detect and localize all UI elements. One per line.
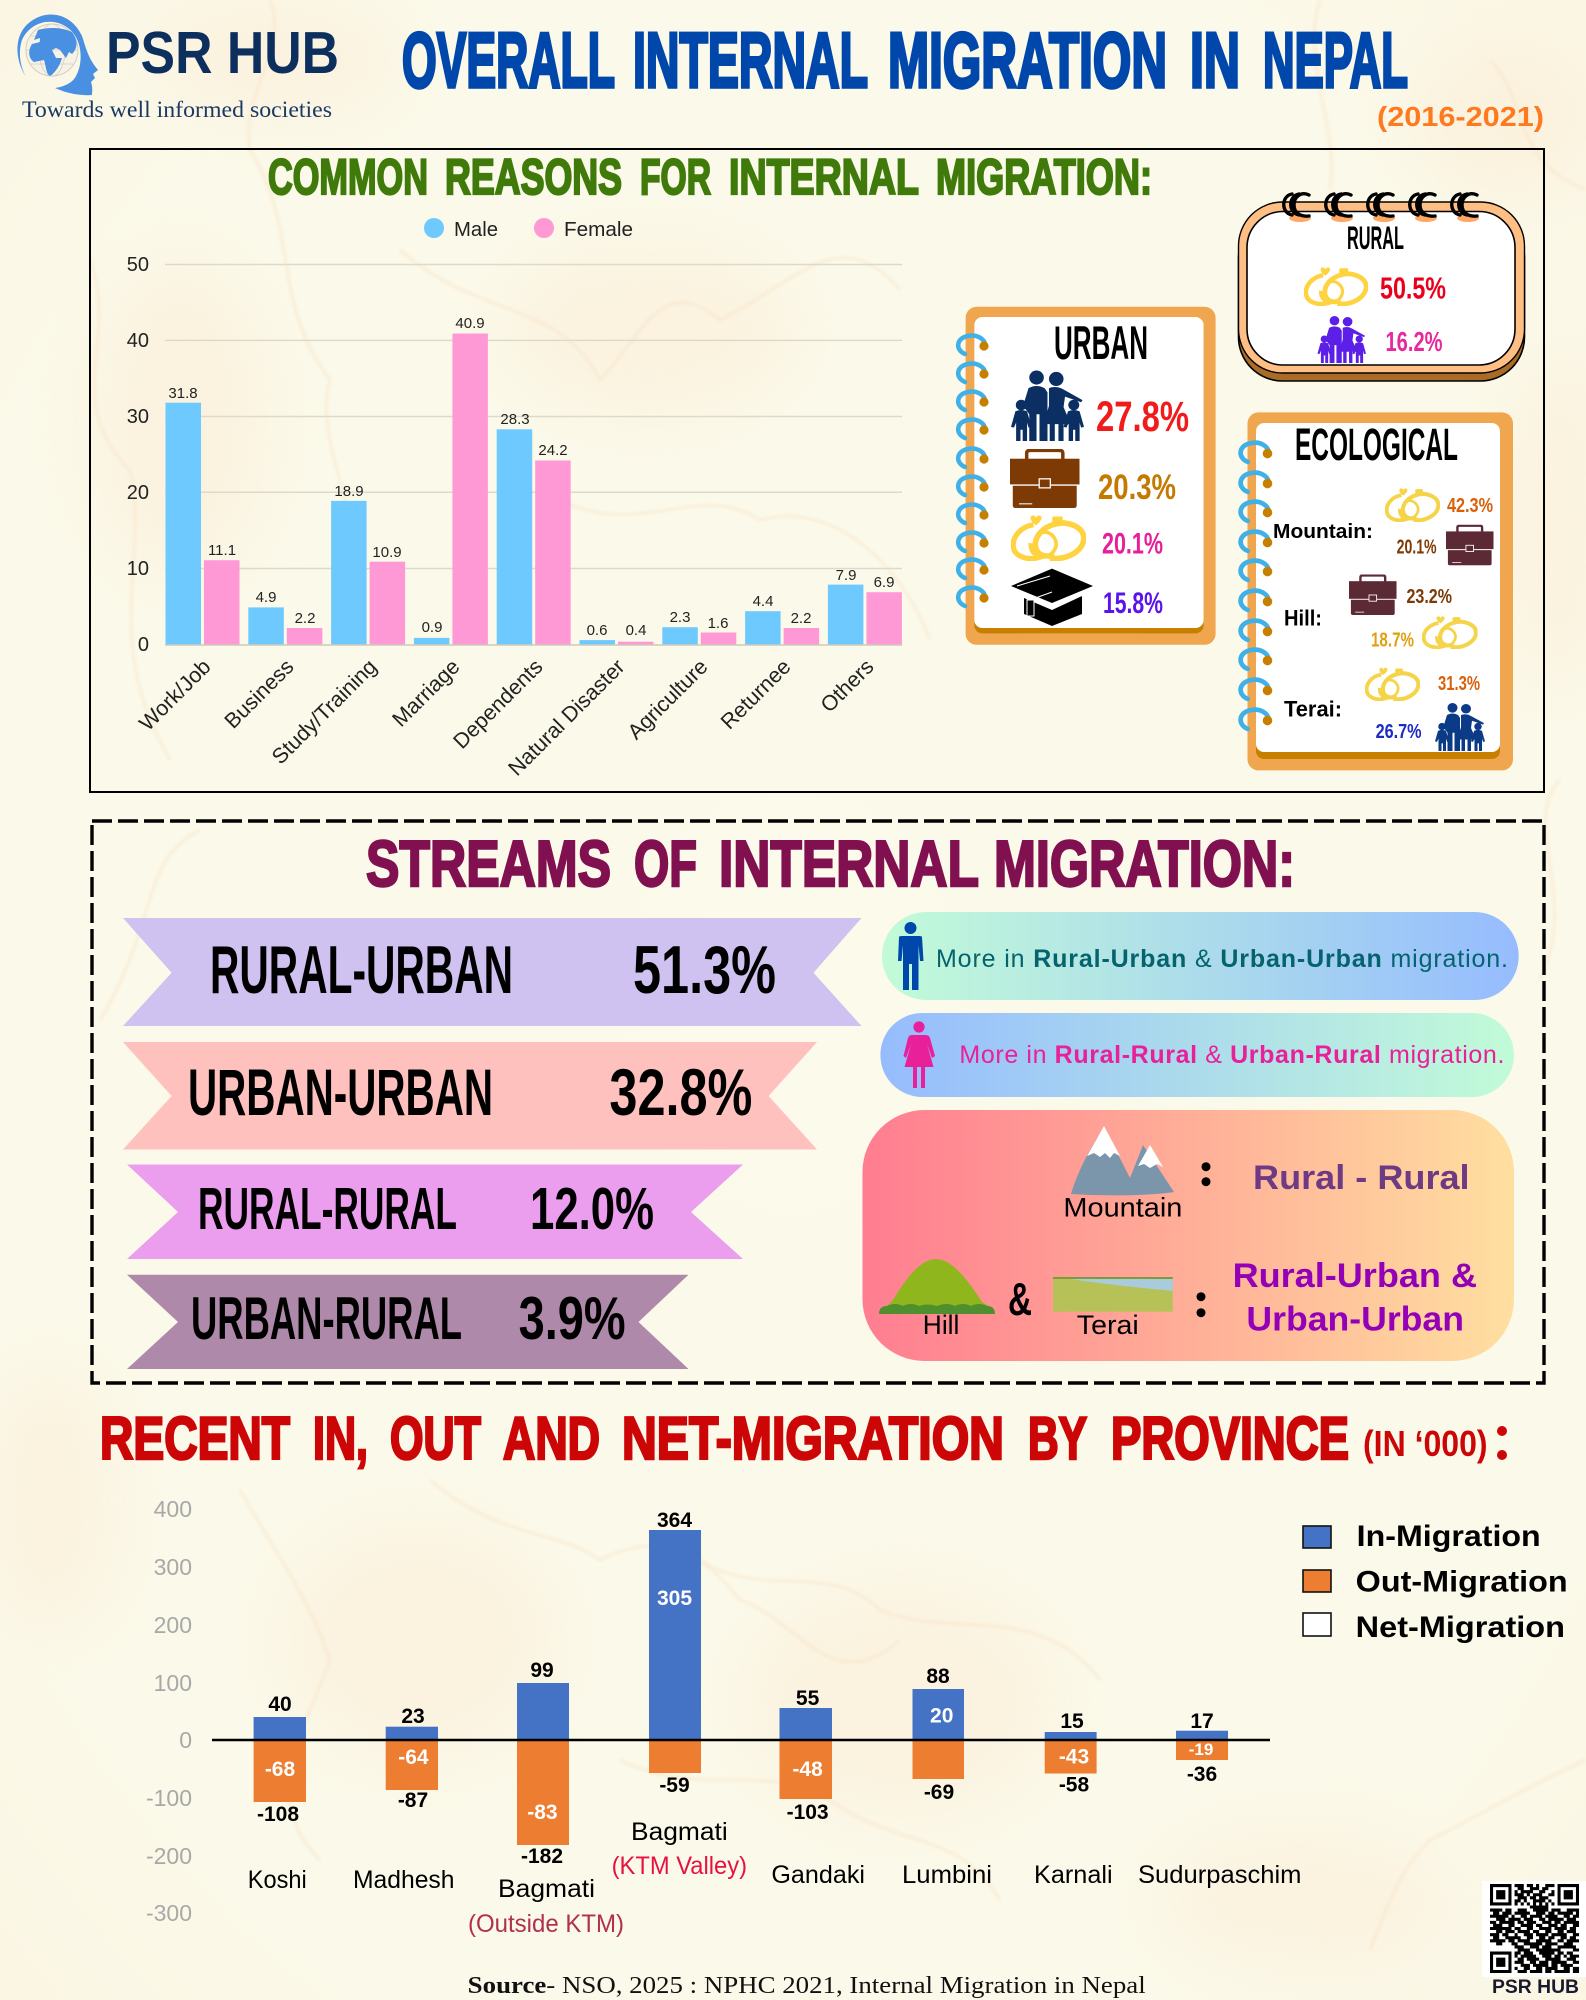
heading: province migration: AND (503, 1405, 600, 1472)
spiral binding (958, 336, 989, 606)
net-migration labels: -48 (792, 1758, 823, 1781)
hill label: Hill (923, 1310, 959, 1340)
terai row: Terai: (1284, 696, 1342, 721)
ampersand: & (1008, 1273, 1032, 1325)
mountain label: Mountain (1063, 1193, 1182, 1223)
mountain stream: Rural - Rural (1253, 1159, 1470, 1197)
urban work value: 20.3% (1098, 468, 1176, 507)
heading: common reasons: INTERNAL (729, 149, 919, 205)
out-migration labels: -108 (257, 1803, 299, 1826)
hill and terai streams (1233, 1257, 1477, 1339)
province labels: Lumbini (902, 1861, 992, 1889)
y axis labels: 50 (127, 254, 149, 276)
heading: streams: INTERNAL (719, 827, 979, 900)
ribbon: rural-urban: 51.3% (633, 932, 776, 1008)
category labels (135, 655, 879, 781)
icon: family (1318, 316, 1366, 363)
spiral binding (1241, 443, 1272, 729)
net-migration labels: -19 (1189, 1740, 1213, 1759)
value labels: 6.9 (874, 574, 894, 591)
male text: More in Rural-Urban & Urban-Urban migration. (936, 945, 1508, 973)
in-migration labels: 364 (657, 1509, 692, 1532)
value labels: 0.6 (587, 622, 607, 639)
province labels: Gandaki (771, 1861, 865, 1889)
province labels: Koshi (248, 1866, 307, 1894)
callout: female pattern (880, 1013, 1514, 1097)
chart: province migration (146, 1496, 1302, 1938)
province labels (248, 1818, 1301, 1938)
net-migration labels: -43 (1059, 1746, 1089, 1769)
heading: streams: OF (634, 827, 697, 900)
icon: graduation cap (1011, 569, 1093, 626)
colon (1196, 1292, 1206, 1317)
female bars (204, 334, 902, 645)
category labels: Marriage (388, 655, 465, 732)
hill and terai streams: Urban-Urban (1246, 1301, 1464, 1339)
value labels: 7.9 (836, 567, 856, 584)
value labels: 40.9 (455, 315, 485, 332)
heading: common reasons: REASONS (445, 149, 622, 205)
hill row: 23.2% (1406, 586, 1452, 608)
heading: common reasons (268, 149, 1152, 205)
out-migration labels (257, 1763, 1217, 1868)
ribbon: urban-urban: URBAN-URBAN (188, 1055, 493, 1129)
y axis labels (146, 1496, 192, 1926)
province labels: Bagmati (498, 1875, 595, 1903)
mountain row: 42.3% (1447, 495, 1493, 517)
y axis labels: 20 (127, 482, 149, 504)
ribbon: rural-rural: 12.0% (530, 1176, 654, 1242)
category labels: Work/Job (135, 655, 216, 735)
category labels: Returnee (716, 655, 796, 734)
logo tagline: Towards well informed societies (22, 97, 332, 122)
title: NEPAL (1263, 16, 1408, 104)
QR code (1482, 1881, 1586, 1998)
heading: province migration: OUT (390, 1405, 481, 1472)
net-migration labels (265, 1587, 1213, 1824)
in-migration labels: 15 (1060, 1710, 1084, 1733)
QR caption: PSR HUB (1492, 1977, 1579, 1998)
in-migration bars (254, 1530, 1228, 1740)
heading: province migration: NET-MIGRATION (622, 1405, 1004, 1472)
terai label: Terai (1077, 1310, 1139, 1340)
legend: migration types (1303, 1520, 1568, 1644)
ribbon: urban-rural (127, 1275, 688, 1369)
value labels: 28.3 (500, 411, 530, 428)
legend: sex: Female (564, 219, 633, 241)
icon: rings (1013, 516, 1084, 559)
ribbon: rural-urban: RURAL-URBAN (210, 932, 513, 1008)
terai row: 31.3% (1438, 673, 1480, 695)
out-migration labels: -103 (787, 1801, 829, 1824)
urban heading: URBAN (1054, 316, 1148, 369)
mountain row (1273, 488, 1494, 565)
ribbon: rural-urban (123, 918, 862, 1026)
heading: province migration: PROVINCE (1111, 1405, 1349, 1472)
bar chart: reasons by sex (127, 218, 902, 781)
province labels: Karnali (1034, 1861, 1113, 1889)
male bars (166, 403, 863, 645)
rural dependents value: 16.2% (1386, 326, 1443, 357)
title: INTERNAL (633, 16, 868, 104)
urban study value: 15.8% (1103, 587, 1163, 620)
title: OVERALL (402, 16, 615, 104)
icon: briefcase (1010, 450, 1080, 508)
value labels: 0.4 (626, 622, 646, 639)
y axis labels: 200 (154, 1612, 192, 1638)
y axis labels: 300 (154, 1554, 192, 1580)
value labels: 2.2 (791, 610, 811, 627)
legend: migration types: Net-Migration (1356, 1611, 1565, 1644)
value labels: 18.9 (334, 483, 364, 500)
value labels: 2.3 (670, 609, 690, 626)
heading: province migration: BY (1028, 1405, 1087, 1472)
value labels: 4.4 (753, 593, 773, 610)
net-migration labels: 20 (930, 1705, 953, 1728)
y axis labels: 0 (179, 1727, 192, 1753)
net-migration labels: -64 (398, 1746, 429, 1769)
province labels: (Outside KTM) (468, 1910, 624, 1938)
icon: woman (904, 1021, 935, 1088)
net-migration labels: -68 (265, 1758, 295, 1781)
in-migration labels: 99 (530, 1659, 554, 1682)
y axis labels: -200 (146, 1843, 192, 1869)
title (402, 16, 1408, 104)
heading: common reasons: FOR (640, 149, 711, 205)
notebook: urban (958, 307, 1216, 645)
category labels: Study/Training (267, 655, 382, 769)
value labels: 0.9 (422, 619, 442, 636)
net-migration labels: -83 (527, 1801, 558, 1824)
coil binding (1284, 194, 1479, 222)
hill row (1284, 575, 1476, 652)
hill row: Hill: (1284, 606, 1322, 630)
heading: province migration: (IN ‘000) (1363, 1423, 1488, 1464)
out-migration labels: -182 (521, 1845, 563, 1868)
out-migration labels: -59 (659, 1774, 690, 1797)
in-migration labels: 17 (1190, 1710, 1214, 1733)
category labels: Natural Disaster (504, 655, 630, 781)
ribbon: rural-rural (127, 1164, 743, 1259)
value labels (168, 315, 894, 639)
ribbon: urban-urban (123, 1042, 817, 1150)
heading: province migration: RECENT (100, 1405, 290, 1472)
notebook: rural (1238, 194, 1524, 381)
heading: streams: MIGRATION: (994, 827, 1295, 900)
icon: family (1011, 370, 1084, 441)
logo wordmark: PSR HUB (106, 20, 339, 86)
y axis labels: 400 (154, 1496, 192, 1522)
out-migration bars (254, 1741, 1228, 1845)
in-migration labels: 40 (268, 1693, 292, 1716)
callout: ecological belts (862, 1110, 1514, 1361)
category labels: Business (220, 655, 299, 733)
logo: PSR HUB (17, 14, 339, 122)
value labels: 24.2 (538, 442, 568, 459)
y axis labels (127, 254, 149, 656)
subtitle: years: (2016-2021) (1377, 101, 1544, 132)
urban marriage value: 20.1% (1102, 528, 1163, 560)
ribbon: rural-rural: RURAL-RURAL (198, 1176, 457, 1242)
province labels: (KTM Valley) (612, 1852, 747, 1880)
in-migration labels (268, 1509, 1214, 1733)
icon: man (898, 922, 924, 990)
source: Source - NSO, 2025 : NPHC 2021, Internal Migration in Nepal (468, 1973, 1146, 1999)
category labels: Agriculture (623, 655, 713, 744)
female text: More in Rural-Rural & Urban-Rural migration. (959, 1041, 1504, 1069)
value labels: 10.9 (372, 544, 402, 561)
value labels: 1.6 (708, 615, 728, 632)
heading: common reasons: MIGRATION: (936, 149, 1152, 205)
icon: mountain (1071, 1126, 1174, 1195)
province labels: Bagmati (631, 1818, 728, 1846)
in-migration labels: 55 (796, 1687, 820, 1710)
icon: head and globe (17, 14, 98, 95)
province labels: Sudurpaschim (1138, 1861, 1302, 1889)
y axis labels: -100 (146, 1785, 192, 1811)
out-migration labels: -87 (398, 1789, 428, 1812)
y axis labels: 10 (127, 558, 149, 580)
y axis labels: 30 (127, 406, 149, 428)
heading: streams: STREAMS (366, 827, 611, 900)
value labels: 31.8 (168, 385, 198, 402)
ribbon: urban-rural: URBAN-RURAL (191, 1285, 462, 1352)
icon: terai (1053, 1277, 1173, 1312)
legend: sex (424, 218, 633, 241)
rural marriage value: 50.5% (1380, 270, 1446, 306)
notebook: ecological (1241, 412, 1513, 770)
hill row: 18.7% (1371, 630, 1414, 652)
value labels: 11.1 (208, 542, 236, 559)
ribbon: urban-rural: 3.9% (519, 1285, 626, 1352)
ribbon: urban-urban: 32.8% (609, 1055, 752, 1129)
category labels: Dependents (449, 655, 548, 754)
province labels: Madhesh (353, 1866, 454, 1894)
urban dependents value: 27.8% (1096, 393, 1189, 441)
in-migration labels: 88 (926, 1665, 950, 1688)
mountain row: 20.1% (1397, 536, 1437, 558)
legend: migration types: In-Migration (1357, 1520, 1541, 1553)
colon (1202, 1162, 1210, 1186)
terai row: 26.7% (1376, 721, 1422, 743)
heading: common reasons: COMMON (268, 149, 428, 205)
legend: sex: Male (454, 219, 498, 241)
y axis labels: 40 (127, 330, 149, 352)
heading: province migration (100, 1405, 1507, 1472)
title: MIGRATION (888, 16, 1167, 104)
out-migration labels: -58 (1059, 1774, 1089, 1796)
mountain row: Mountain: (1273, 521, 1373, 543)
icon: hill (879, 1259, 995, 1314)
panel: common reasons (90, 149, 1544, 792)
net-migration labels: 305 (657, 1587, 692, 1610)
rural heading: RURAL (1347, 220, 1404, 256)
value labels: 2.2 (295, 610, 315, 627)
category labels: Others (816, 655, 879, 717)
value labels: 4.9 (256, 589, 276, 606)
y axis labels: 100 (154, 1670, 192, 1696)
title: IN (1190, 16, 1240, 104)
callout: male pattern (882, 912, 1519, 1000)
heading: streams (366, 827, 1295, 900)
panel: streams (92, 821, 1544, 1383)
hill and terai streams: Rural-Urban & (1233, 1257, 1477, 1295)
y axis labels: 0 (138, 634, 149, 656)
in-migration labels: 23 (401, 1705, 425, 1728)
y axis labels: -300 (146, 1900, 192, 1926)
out-migration labels: -36 (1187, 1763, 1217, 1786)
out-migration labels: -69 (924, 1781, 954, 1804)
heading: province migration: IN, (313, 1405, 368, 1472)
terai row (1284, 668, 1485, 751)
legend: migration types: Out-Migration (1356, 1566, 1568, 1599)
icon: rings (1306, 267, 1366, 304)
